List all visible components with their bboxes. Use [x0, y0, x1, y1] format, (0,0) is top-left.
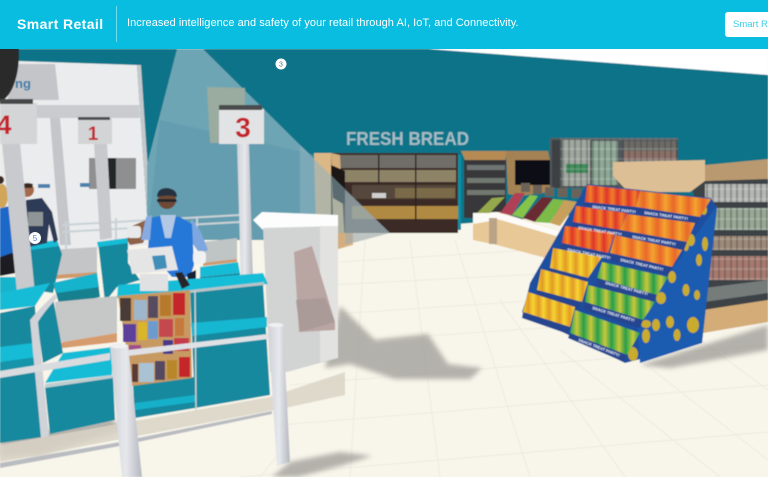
chip graphics on side panel	[628, 205, 708, 361]
floor shadows	[0, 306, 768, 477]
kiosk poster	[294, 246, 335, 332]
customers	[0, 176, 58, 276]
produce stand	[473, 183, 581, 262]
marker 5	[29, 232, 41, 244]
display slogans: SNACK TREAT PARTY!	[567, 247, 611, 260]
lane sign 3: 3	[235, 112, 251, 143]
sign: partial word	[8, 64, 59, 100]
customer: man	[20, 183, 58, 247]
floor	[0, 200, 768, 477]
snack rack	[118, 290, 192, 386]
marker 5: 5	[33, 234, 38, 243]
lane sign 1: 1	[88, 124, 99, 145]
display slogans: SNACK TREAT PARTY!	[592, 305, 635, 323]
sign: partial word: ng	[15, 76, 31, 91]
brand title: Smart Retail	[17, 16, 104, 32]
fresh bread heading: FRESH BREAD	[346, 128, 469, 149]
lane sign 1	[78, 117, 112, 145]
display slogans: SNACK TREAT PARTY!	[644, 210, 688, 221]
cone overlay on bakery	[300, 145, 390, 233]
bakery poster	[207, 87, 245, 143]
tagline: Increased intelligence and safety of your retail through AI, IoT, and Connectivity.	[127, 17, 519, 29]
row: green packs	[568, 262, 668, 362]
left front counters	[0, 283, 117, 443]
header divider	[116, 6, 117, 42]
back counters	[0, 238, 240, 307]
back rails	[62, 215, 240, 250]
lane pole 1	[94, 143, 112, 240]
display slogans: SNACK TREAT PARTY!	[592, 204, 636, 214]
display slogans: SNACK TREAT PARTY!	[620, 257, 664, 272]
gray bagging stands back	[50, 247, 97, 277]
lane pole 3	[237, 143, 253, 282]
floor tile grid	[240, 235, 768, 477]
ceiling wedge	[428, 49, 768, 75]
cashier	[127, 188, 208, 282]
header bar	[0, 0, 768, 49]
dark wood shelf units	[461, 151, 550, 218]
display slogans: SNACK TREAT PARTY!	[605, 280, 649, 296]
snack display stand	[522, 184, 717, 363]
lane sign 3	[219, 105, 264, 144]
row: orange packs	[608, 191, 711, 275]
light cone on wall	[147, 49, 316, 240]
barrier rails	[0, 334, 272, 468]
marker 3: 3	[279, 62, 283, 68]
front main counter	[117, 273, 270, 418]
display slogans: SNACK TREAT PARTY!	[632, 234, 676, 247]
lane pole 4	[2, 143, 36, 303]
back shelf: drinks	[550, 138, 678, 188]
marker 3	[276, 58, 286, 70]
barrier posts	[110, 323, 290, 477]
display slogans: SNACK TREAT PARTY!	[578, 225, 622, 237]
customer: woman	[0, 176, 16, 276]
white kiosk display	[253, 212, 338, 372]
display slogans: SNACK TREAT PARTY!	[578, 337, 621, 358]
ceiling lamp	[0, 6, 19, 102]
payment terminal	[127, 246, 190, 291]
row: red packs	[560, 185, 640, 259]
back wall	[0, 49, 768, 240]
row: yellow packs	[522, 248, 602, 334]
right gondola shelves	[693, 179, 768, 333]
wooden gondola top	[613, 159, 768, 192]
lane sign 4	[0, 99, 37, 144]
dark window	[89, 158, 136, 189]
display slogans	[567, 204, 688, 358]
floor base strip	[0, 372, 345, 462]
header button	[725, 12, 768, 37]
left checkout building	[0, 61, 153, 255]
bakery shelf	[314, 153, 461, 250]
